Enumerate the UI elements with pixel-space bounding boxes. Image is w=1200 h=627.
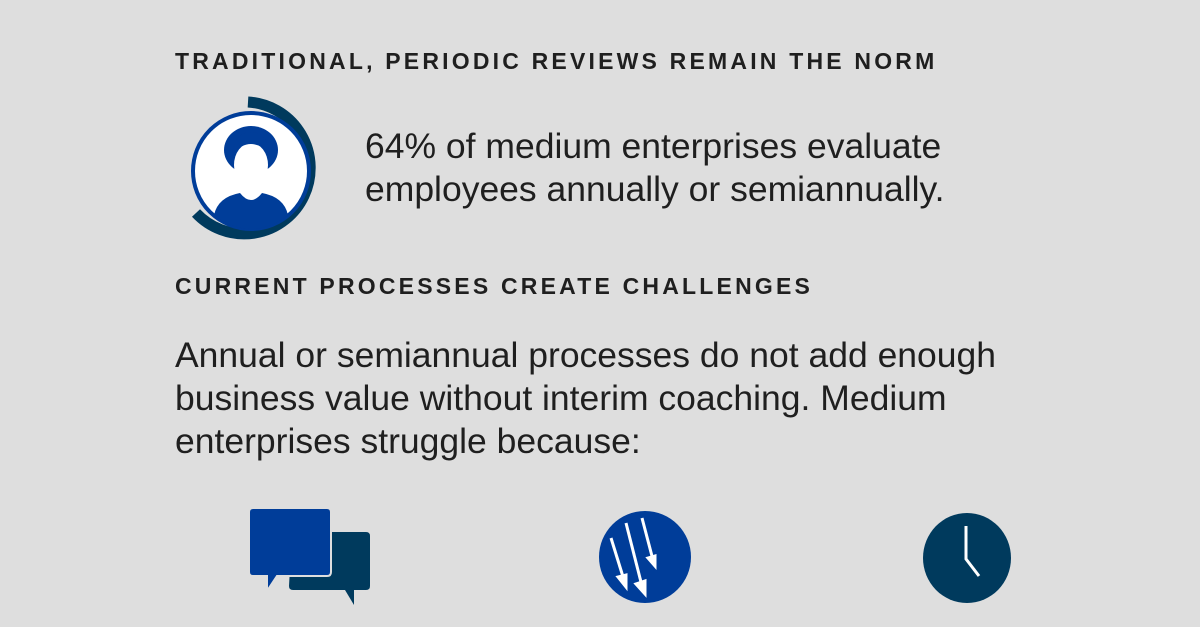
text: paragraph: Annual or semiannual processes do not add enough	[175, 335, 996, 375]
icon: person with progress ring	[191, 96, 316, 240]
heading: traditional reviews: TRADITIONAL, PERIODIC REVIEWS REMAIN THE NORM	[175, 48, 937, 74]
text: paragraph: enterprises struggle because:	[175, 421, 641, 461]
icon: downward arrows circle	[599, 511, 691, 603]
text: 64% stat: employees annually or semiannually.	[365, 169, 944, 209]
heading: current processes: CURRENT PROCESSES CREATE CHALLENGES	[175, 273, 813, 299]
icon: chat bubbles	[250, 509, 370, 605]
icon: clock	[923, 513, 1011, 603]
text: 64% stat	[365, 126, 944, 209]
text: paragraph	[175, 335, 996, 461]
text: 64% stat: 64% of medium enterprises evaluate	[365, 126, 941, 166]
text: paragraph: business value without interim coaching. Medium	[175, 378, 947, 418]
